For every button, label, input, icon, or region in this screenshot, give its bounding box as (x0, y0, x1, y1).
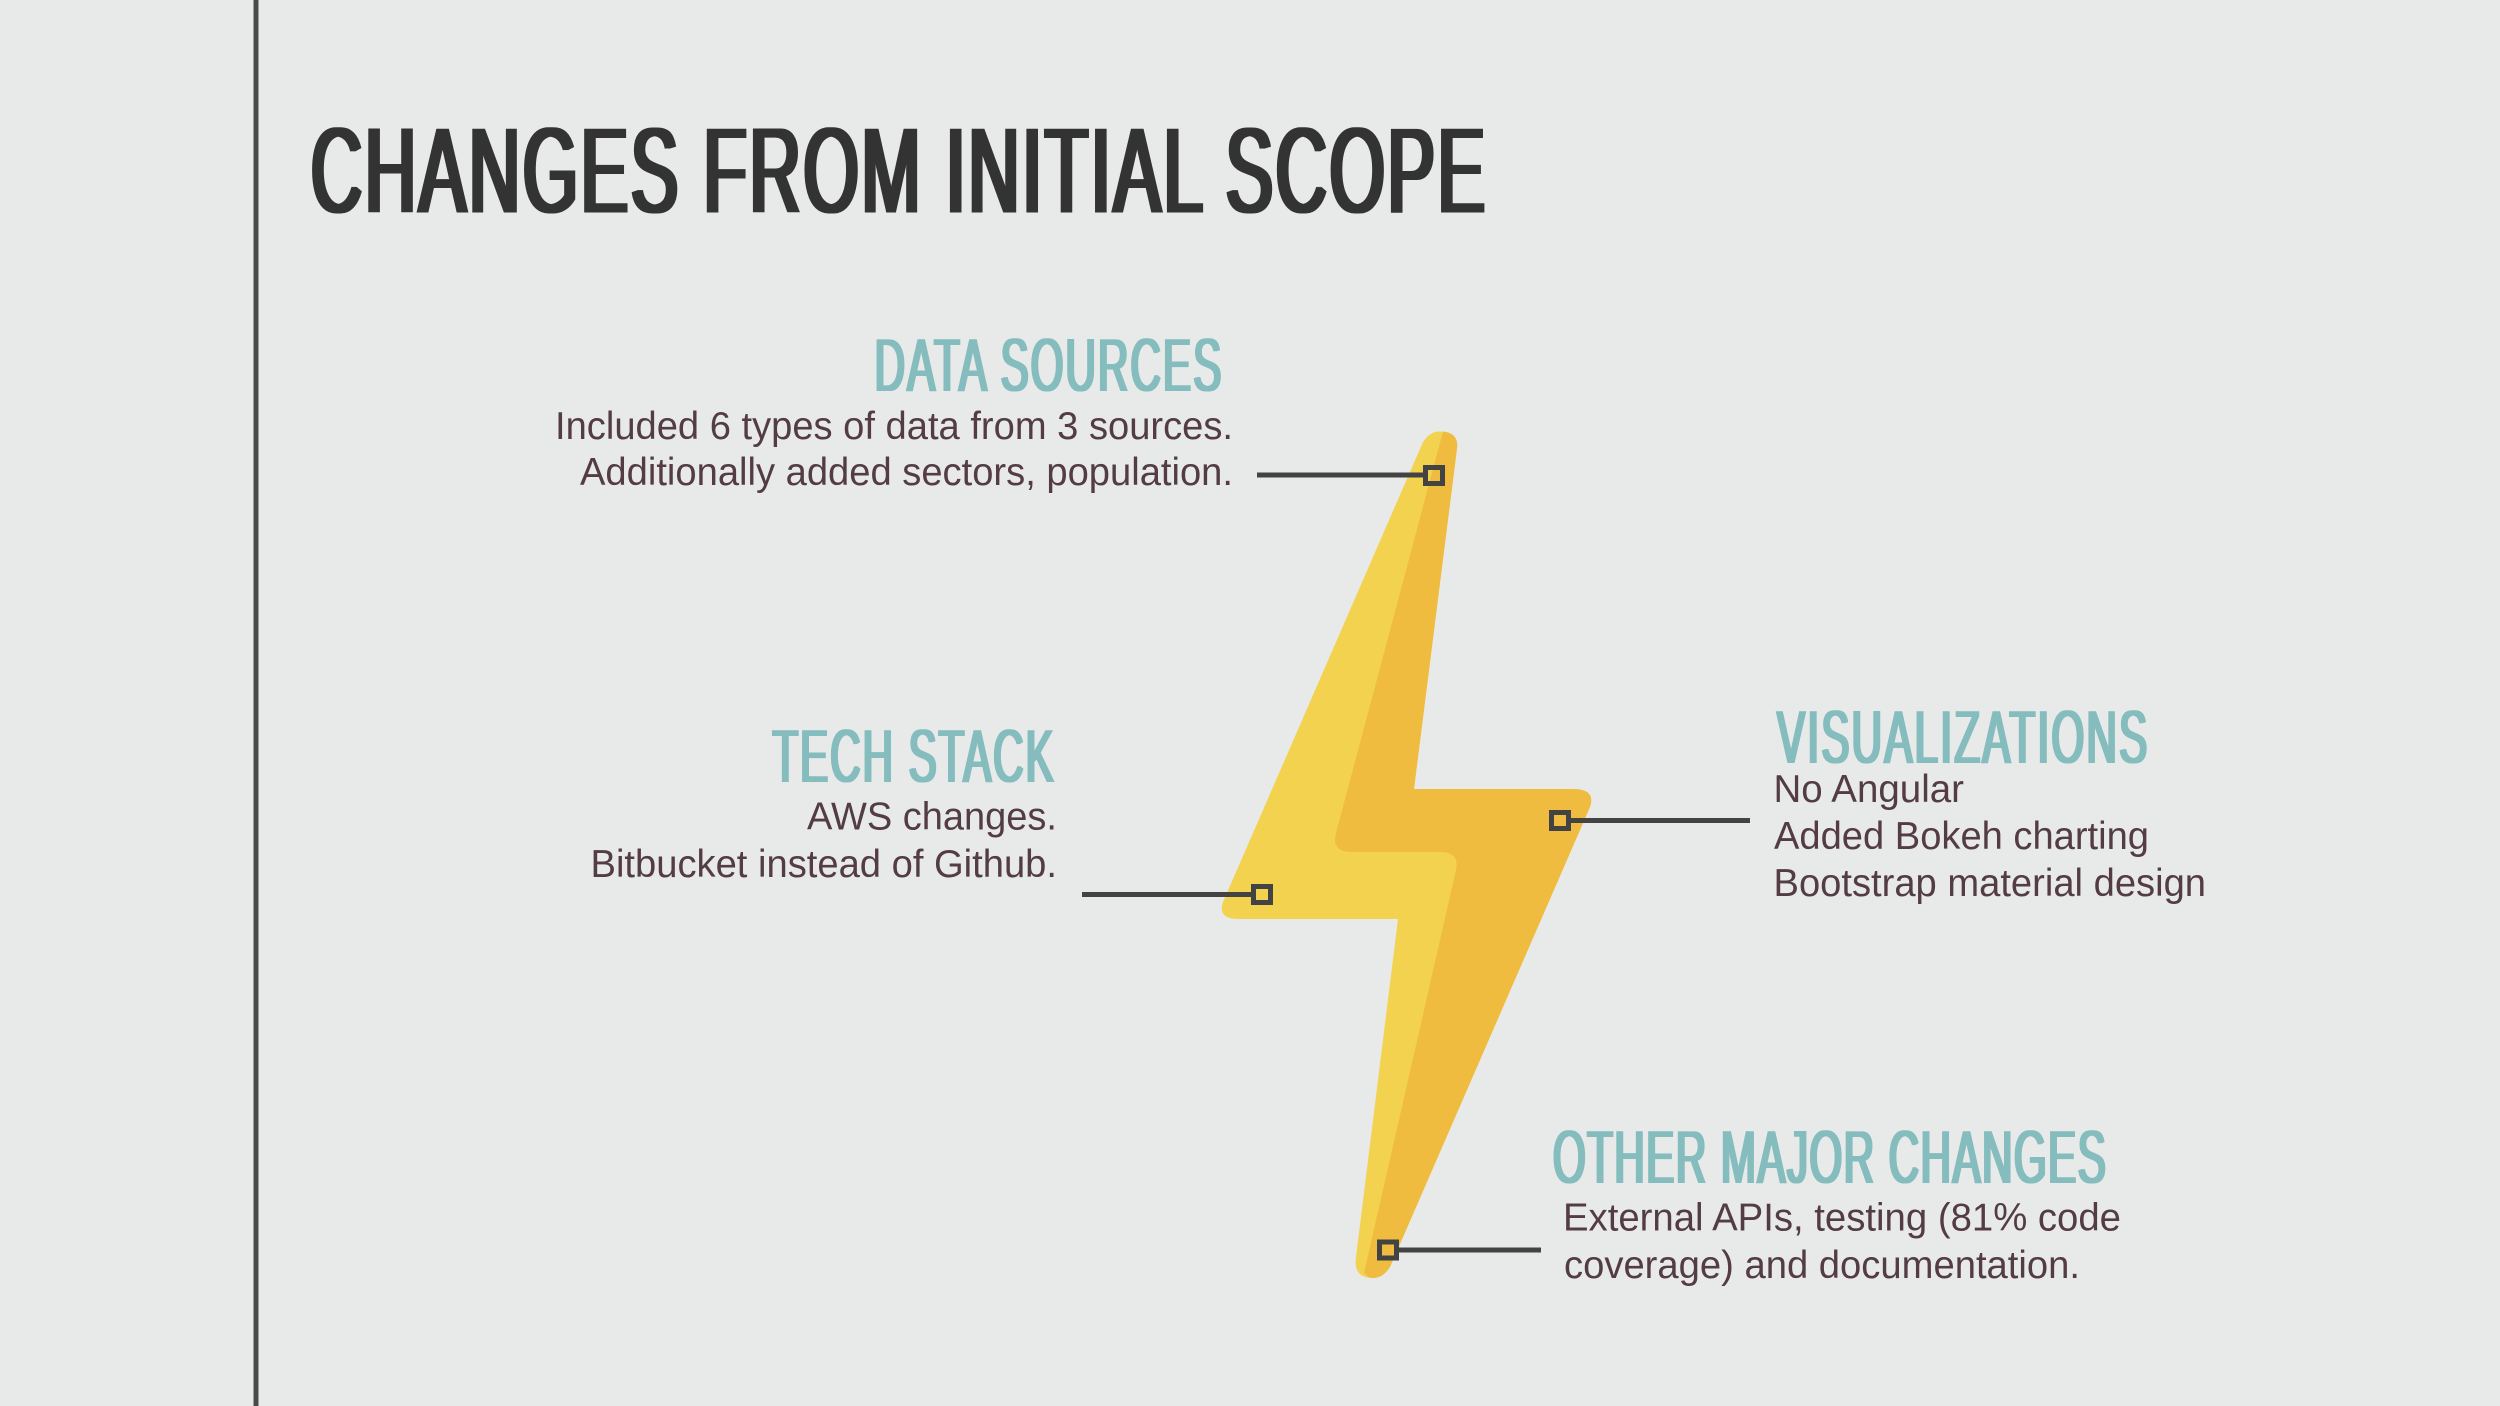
body: data sources: Additionally added sectors, population. (580, 451, 1233, 494)
heading: visualizations: VISUALIZATIONS (1777, 695, 2147, 779)
connector: data sources (1257, 468, 1442, 484)
body: visualizations: Bootstrap material design (1774, 862, 2206, 905)
heading: tech stack: TECH STACK (772, 714, 1054, 798)
body: data sources (555, 405, 1233, 494)
connector: other major changes (1380, 1242, 1541, 1258)
connector: tech stack (1082, 886, 1270, 902)
body: data sources: Included 6 types of data from 3 sources. (555, 405, 1233, 448)
heading: data sources: DATA SOURCES (875, 323, 1221, 407)
icon: lightning bolt (1222, 432, 1591, 1278)
panel: tech stack (590, 714, 1057, 886)
body: tech stack (590, 796, 1057, 886)
body: visualizations: No Angular (1774, 768, 1964, 811)
panel: visualizations (1774, 695, 2206, 905)
vertical rule (254, 0, 258, 1406)
connector: visualizations (1552, 812, 1750, 828)
body: tech stack: AWS changes. (807, 796, 1057, 838)
body: visualizations: Added Bokeh charting (1774, 815, 2149, 858)
panel: other major changes (1553, 1115, 2121, 1287)
body: visualizations (1774, 768, 2206, 905)
body: other major changes: coverage) and documentation. (1564, 1244, 2080, 1287)
title: CHANGES FROM INITIAL SCOPE (311, 104, 1485, 240)
body: tech stack: Bitbucket instead of Github. (590, 843, 1057, 886)
body: other major changes (1563, 1196, 2121, 1287)
panel: data sources (555, 323, 1233, 494)
heading: other major changes: OTHER MAJOR CHANGES (1553, 1115, 2106, 1199)
body: other major changes: External APIs, testing (81% code (1563, 1196, 2121, 1240)
